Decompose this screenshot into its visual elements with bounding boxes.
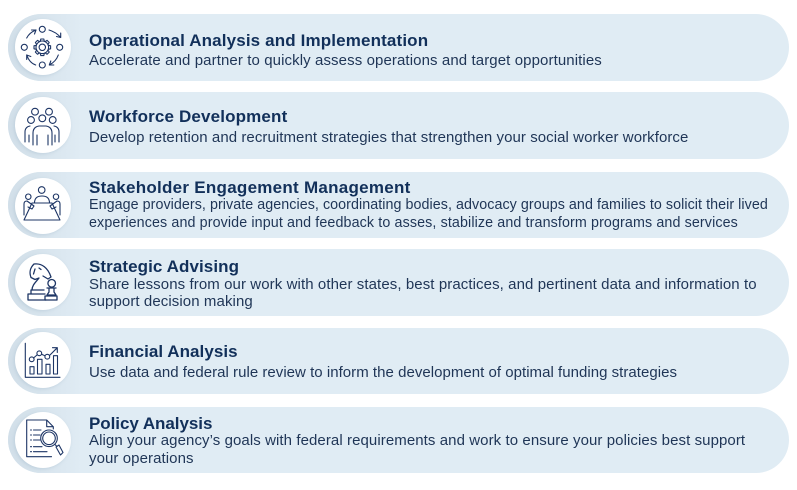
panel: workforce development — [8, 92, 789, 159]
panel: financial analysis — [8, 328, 789, 394]
title: operational: Operational Analysis and Implementation — [89, 31, 428, 50]
icon: chess knight and pawn — [27, 263, 58, 301]
icon: meeting table — [23, 186, 61, 220]
text: strategic: support decision making — [89, 293, 253, 310]
panel: strategic advising — [8, 249, 789, 316]
text: operational: Accelerate and partner to quickly assess operations and target opportunities — [89, 52, 602, 69]
text: strategic — [89, 276, 757, 310]
title: workforce: Workforce Development — [89, 106, 287, 126]
text: workforce: Develop retention and recruitment strategies that strengthen your social worker workforce — [89, 129, 688, 146]
title: stakeholder: Stakeholder Engagement Management — [89, 178, 411, 197]
panel: operational analysis — [8, 14, 789, 81]
icon: bar chart with trend — [24, 342, 60, 378]
title: strategic: Strategic Advising — [89, 257, 239, 276]
text: strategic: Share lessons from our work with other states, best practices, and pertinent data and information to — [89, 276, 757, 292]
text: stakeholder: Engage providers, private agencies, coordinating bodies, advocacy groups and families to solicit their lived — [89, 197, 768, 213]
text: stakeholder: experiences and provide input and feedback to asses, stabilize and transform programs and services — [89, 214, 738, 230]
text: policy: Align your agency’s goals with federal requirements and work to ensure your policies best support — [89, 432, 745, 449]
panel: stakeholder engagement — [8, 172, 789, 238]
text: policy — [89, 432, 745, 466]
icon: document with magnifier — [26, 420, 64, 458]
text: policy: your operations — [89, 450, 194, 466]
icon: group of people — [24, 108, 60, 146]
title: policy: Policy Analysis — [89, 414, 212, 433]
text: financial: Use data and federal rule review to inform the development of optimal funding strategies — [89, 364, 677, 380]
panel: policy analysis — [8, 407, 789, 473]
text: stakeholder — [89, 197, 768, 230]
title: financial: Financial Analysis — [89, 342, 238, 361]
icon circles with soft shadow — [8, 14, 72, 473]
icon: gear with cycle arrows — [20, 26, 64, 68]
